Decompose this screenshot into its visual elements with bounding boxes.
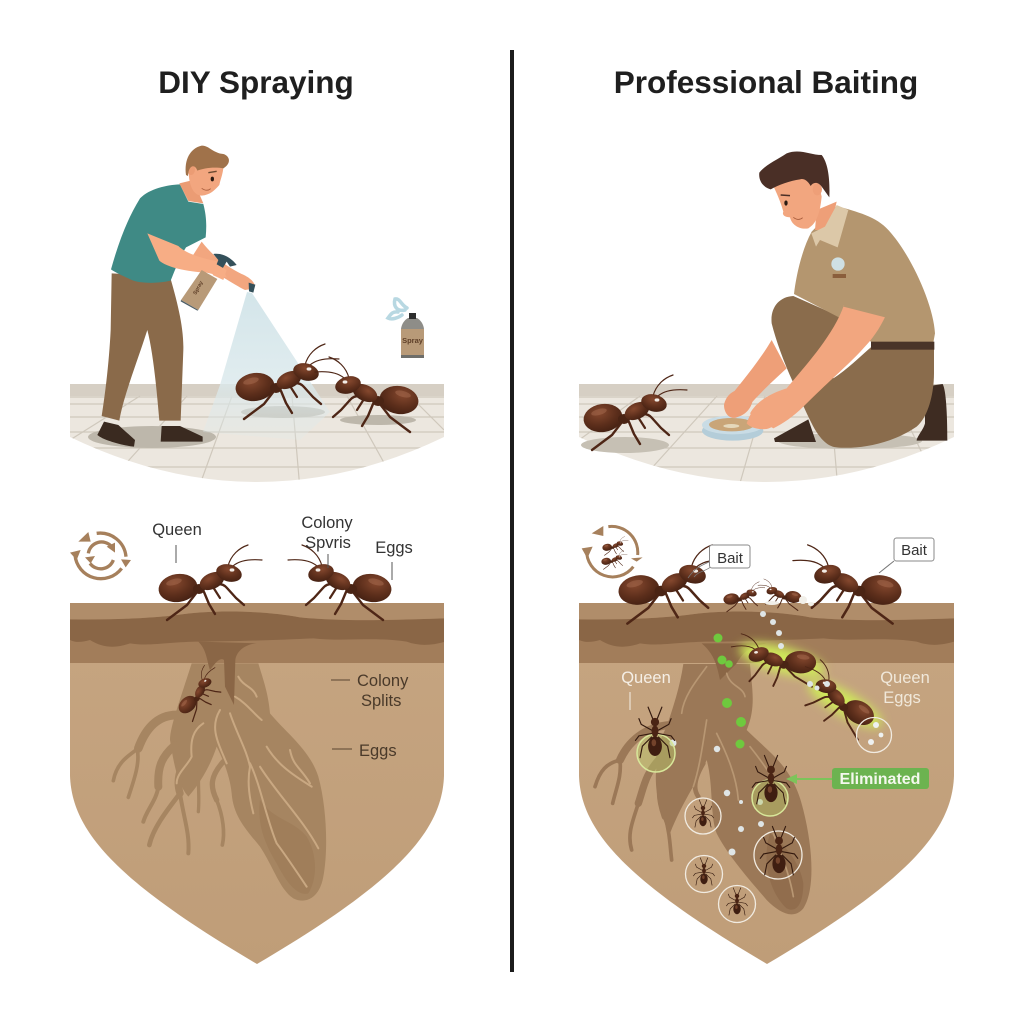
small ant at bait (723, 582, 765, 612)
callout: Bait right: Bait (901, 542, 928, 559)
ant on floor: right (315, 357, 420, 432)
head (774, 177, 822, 229)
collar (811, 205, 848, 247)
ear (187, 164, 195, 175)
callout: Eliminated: Eliminated (840, 771, 920, 788)
man spraying (97, 146, 255, 447)
panel: DIY floor scene (70, 146, 444, 494)
label: Queen: Queen (152, 521, 202, 539)
callout: Eliminated (786, 768, 929, 789)
green bait dots (714, 634, 746, 748)
ant glow trails (736, 636, 887, 735)
label: Eggs (375, 539, 413, 580)
glowing ant: lower (787, 656, 888, 743)
bottle (181, 254, 237, 311)
dark soil band (70, 611, 445, 647)
hand and nozzle (213, 263, 227, 280)
trousers (102, 273, 183, 421)
front arm (147, 233, 227, 277)
neck (179, 180, 203, 203)
cycle icon (70, 532, 131, 579)
soil cross-section (579, 603, 954, 965)
center divider (510, 50, 514, 972)
shoes (97, 422, 135, 447)
ringed ant 2 (686, 856, 722, 892)
tunnel network (595, 643, 811, 914)
white bait dots (670, 611, 830, 856)
shirt (111, 184, 206, 283)
spray can (388, 299, 424, 358)
trousers (771, 296, 934, 448)
soil cross-section (70, 603, 445, 965)
bait spill (765, 596, 814, 606)
neck (815, 202, 837, 230)
near arm (750, 305, 886, 428)
ear (813, 183, 822, 195)
ant in tunnel (166, 661, 233, 725)
light veins (682, 667, 793, 897)
label: Colony Splits (331, 672, 409, 710)
light veins (177, 677, 318, 887)
hands (724, 390, 753, 418)
professional technician (702, 151, 947, 448)
surface ant: right (288, 545, 393, 620)
surface ant: queen (157, 545, 262, 620)
ringed ant 1 (685, 798, 721, 834)
eliminated circle: lower queen (752, 755, 790, 816)
sleeve (843, 298, 888, 317)
label: Colony Spvris: Spvris (305, 534, 351, 552)
title: DIY Spraying: DIY Spraying (158, 64, 354, 100)
top soil layer (70, 603, 445, 620)
back arm (192, 242, 255, 290)
label: Colony Splits: Colony (357, 672, 409, 690)
eggs in circle (856, 718, 892, 752)
callout: Bait left (688, 545, 750, 578)
trunk into band (702, 643, 767, 680)
dark soil band (579, 611, 954, 647)
top soil layer (579, 603, 954, 620)
spray cone (203, 292, 330, 440)
spray can: Spray (402, 336, 424, 345)
boot (917, 384, 947, 441)
tunnel network (113, 642, 326, 901)
eliminated circle: queen (635, 707, 675, 772)
callout: Bait left: Bait (717, 550, 744, 567)
callout: Bait right (879, 538, 934, 573)
panel: DIY underground colony (70, 514, 445, 965)
label: Queen Eggs: Eggs (883, 689, 921, 707)
ant shadows (241, 406, 416, 425)
spray wisps (388, 299, 407, 319)
floor (579, 384, 954, 482)
hair (759, 151, 829, 197)
floor (70, 384, 444, 482)
title: Professional Baiting: Professional Baiting (614, 64, 918, 100)
shadows (581, 433, 922, 453)
man shadow (88, 426, 216, 448)
trunk into band (198, 642, 257, 705)
face details (781, 195, 803, 219)
label: Queen Eggs: Queen (880, 669, 930, 687)
ringed ant 3 (718, 886, 756, 922)
hair (186, 146, 229, 176)
label: Colony Spvris: Colony (301, 514, 353, 532)
label: Eggs: Eggs (375, 539, 413, 557)
face details (202, 171, 217, 190)
front shoe (774, 419, 816, 442)
bait dish (702, 416, 763, 441)
belt (871, 342, 934, 350)
label: Eggs underground: Eggs (359, 742, 397, 760)
label: Queen (152, 521, 202, 563)
label: Eggs underground (332, 742, 397, 760)
surface ant: left (617, 545, 727, 624)
ant approaching bait (582, 375, 687, 450)
surface ant: right (793, 545, 903, 624)
label: Queen: Queen (621, 669, 671, 687)
name tag (833, 274, 846, 278)
bottle: Spray (192, 280, 205, 296)
far arm (730, 340, 787, 407)
small ant at bait spill (758, 579, 802, 610)
ringed ant 4 (754, 826, 802, 879)
label: Colony Splits: Splits (361, 692, 401, 710)
panel: Professional underground colony (579, 526, 954, 965)
label: Colony Spvris (301, 514, 353, 568)
label: Queen Eggs (880, 669, 930, 707)
badge (831, 257, 845, 271)
glowing ant: upper (730, 626, 820, 695)
shirt (794, 206, 935, 343)
ant on floor: left (234, 344, 339, 419)
panel: Professional floor scene (579, 151, 954, 494)
label: Queen (621, 669, 671, 710)
head (188, 163, 223, 196)
cycle icon with ants (582, 526, 643, 577)
